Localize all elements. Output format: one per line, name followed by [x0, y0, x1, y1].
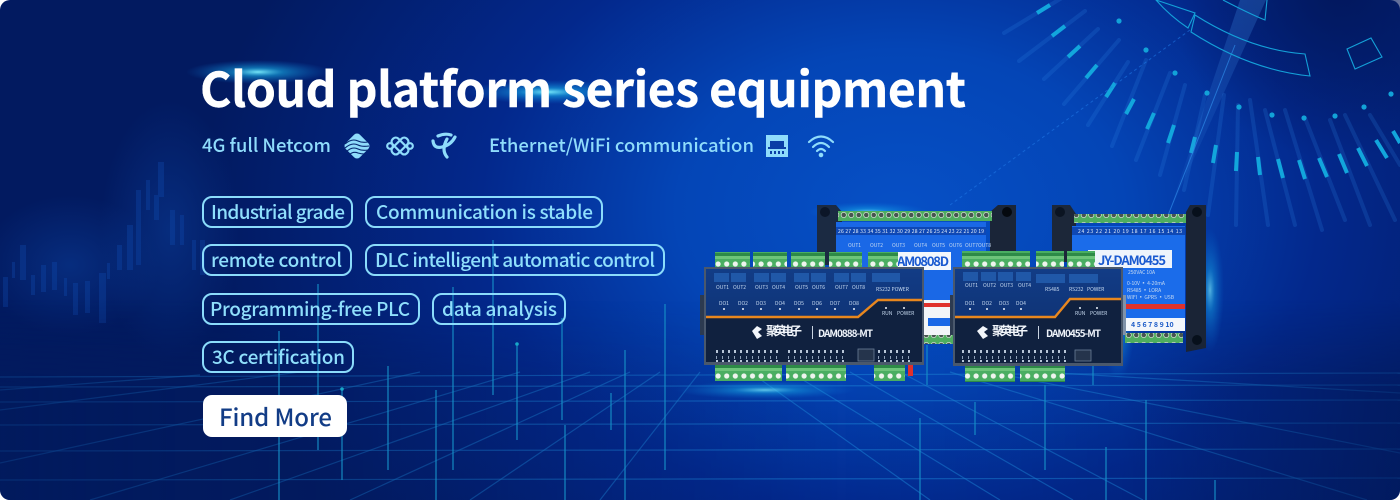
device: DAM0455-MT (front): POWER — [1087, 286, 1105, 293]
tag: 3C certification: 3C certification — [212, 343, 345, 370]
icon: China Mobile — [343, 132, 371, 160]
title glow flares — [186, 60, 630, 104]
device: DAM0888-MT (front): OUT7 — [835, 284, 848, 291]
tag: Programming-free PLC: Programming-free PLC — [210, 295, 410, 322]
light beam and dashed line — [950, 0, 1266, 218]
icon: wifi — [809, 136, 833, 156]
device: DAM0888-MT (front): DO6 — [812, 300, 822, 307]
device: DAM0888-MT (front): RS232 POWER — [876, 286, 910, 293]
device: DAM0455-MT (front): POWER — [1090, 310, 1108, 317]
device: DAM0808D (rear): OUT5 — [932, 242, 945, 249]
device: DAM0455-MT (front): OUT1 — [965, 282, 978, 289]
device: DAM0888-MT (front): OUT2 — [733, 284, 746, 291]
device: DAM0888-MT (front): DO1 — [719, 300, 729, 307]
device: DAM0808D (rear): OUT6 — [949, 242, 962, 249]
device: JY-DAM0455 (rear): 4 5 6 7 8 9 10 — [1131, 320, 1174, 330]
icon: China Unicom — [387, 136, 413, 156]
device: DAM0888-MT (front): DO8 — [849, 300, 859, 307]
device: DAM0888-MT (front): OUT4 — [772, 284, 785, 291]
device: DAM0455-MT (front): DAM0455-MT — [1046, 325, 1101, 340]
device: DAM0808D (rear): AM0808D — [896, 251, 949, 270]
device: DAM0808D (rear) — [817, 205, 1016, 344]
device: DAM0888-MT (front): DO4 — [775, 300, 785, 307]
device: JY-DAM0455 (rear): WIFI ▪ GPRS ▪ USB — [1127, 294, 1175, 301]
tag: DLC intelligent automatic control: DLC intelligent automatic control — [375, 246, 655, 273]
subtitle: 4G full Netcom: 4G full Netcom — [202, 132, 331, 158]
device: JY-DAM0455 (rear) — [1052, 205, 1206, 352]
device: DAM0888-MT (front): DO3 — [756, 300, 766, 307]
device: DAM0808D (rear): OUT2 — [870, 242, 883, 249]
dark corner sphere — [1170, 0, 1400, 180]
device: DAM0455-MT (front): OUT2 — [983, 282, 996, 289]
device: DAM0455-MT (front): 聚英电子 — [992, 322, 1028, 339]
data light pillars — [279, 240, 1215, 500]
device glows — [675, 202, 1224, 399]
device: DAM0808D (rear): OUT4 — [914, 242, 927, 249]
radial light rays — [1004, 0, 1400, 230]
tag: Communication is stable: Communication is stable — [376, 198, 593, 225]
device: DAM0455-MT (front): DO3 — [999, 300, 1009, 307]
perspective grid floor — [0, 372, 1400, 500]
device: DAM0455-MT (front): OUT3 — [1000, 282, 1013, 289]
subtitle: Ethernet/WiFi communication: Ethernet/WiFi communication — [489, 132, 754, 158]
faint candlestick chart — [0, 100, 240, 360]
device: DAM0888-MT (front) — [700, 252, 924, 381]
tag: Industrial grade: Industrial grade — [211, 198, 345, 225]
title: Cloud platform series equipment — [200, 51, 966, 121]
floor shading — [0, 330, 1400, 500]
device: DAM0888-MT (front): OUT1 — [716, 284, 729, 291]
device: DAM0888-MT (front): OUT3 — [755, 284, 768, 291]
device: DAM0888-MT (front): OUT8 — [852, 284, 865, 291]
device: DAM0808D (rear): OUT3 — [892, 242, 905, 249]
device: DAM0455-MT (front): DO2 — [982, 300, 992, 307]
button: Find More — [203, 395, 347, 437]
device: DAM0808D (rear): OUT8 — [978, 242, 991, 249]
device: DAM0455-MT (front) — [950, 251, 1126, 382]
device: DAM0888-MT (front): DAM0888-MT — [818, 325, 873, 340]
device: DAM0808D (rear): OUT1 — [848, 242, 861, 249]
device: JY-DAM0455 (rear): 250VAC 10A — [1128, 269, 1156, 276]
device: DAM0888-MT (front): DO5 — [794, 300, 804, 307]
device: DAM0455-MT (front): RS485 — [1045, 286, 1060, 293]
device: JY-DAM0455 (rear): JY-DAM0455 — [1098, 250, 1166, 269]
device: DAM0808D (rear): 26 27 28 33 34 35 31 32 30 29 28 27 26 25 24 23 22 21 20 19 — [838, 228, 984, 235]
device: DAM0888-MT (front): 聚英电子 — [766, 322, 802, 339]
device: DAM0455-MT (front): RUN — [1075, 310, 1086, 317]
device: DAM0455-MT (front): RS232 — [1069, 286, 1084, 293]
device: DAM0888-MT (front): OUT6 — [812, 284, 825, 291]
device: JY-DAM0455 (rear): 0-10V ▪ 4-20mA — [1127, 280, 1166, 287]
device: DAM0888-MT (front): RUN — [882, 310, 893, 317]
tag: remote control: remote control — [211, 246, 342, 273]
icon: ethernet port — [766, 135, 788, 157]
button: Find More: Find More — [219, 398, 332, 433]
device: DAM0455-MT (front): DO1 — [965, 300, 975, 307]
device: DAM0455-MT (front): OUT4 — [1018, 282, 1031, 289]
device: DAM0888-MT (front): POWER — [897, 310, 915, 317]
device: JY-DAM0455 (rear): 24 23 22 21 20 19 18 17 16 15 14 13 — [1078, 228, 1182, 235]
device: DAM0888-MT (front): OUT5 — [795, 284, 808, 291]
device: DAM0888-MT (front): DO2 — [738, 300, 748, 307]
device: DAM0888-MT (front): DO7 — [830, 300, 840, 307]
device: DAM0455-MT (front): DO4 — [1016, 300, 1026, 307]
device: DAM0808D (rear): OUT7 — [965, 242, 978, 249]
device: JY-DAM0455 (rear): RS485 ▪ LORA — [1127, 287, 1162, 294]
HUD arc outlines — [1156, 0, 1382, 76]
icon: China Telecom — [433, 134, 455, 157]
tag: data analysis: data analysis — [442, 295, 557, 322]
